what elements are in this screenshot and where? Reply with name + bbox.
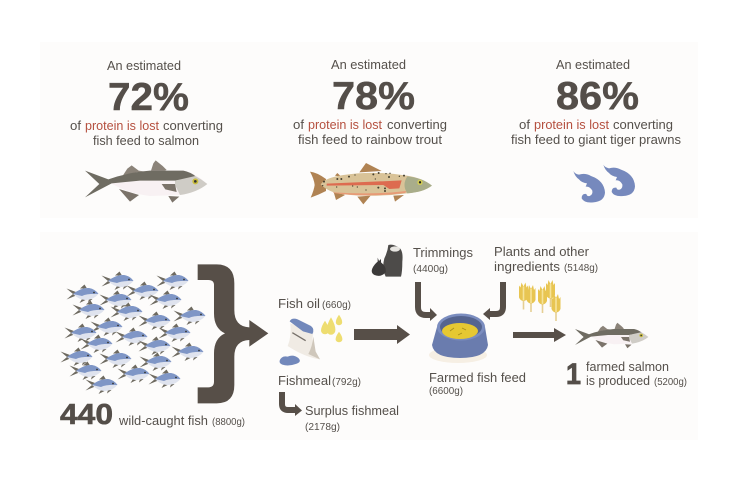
text: 440 wild-caught fish bbox=[60, 399, 245, 431]
stat: rainbow trout: of bbox=[293, 117, 304, 132]
label: farmed fish feed bbox=[429, 370, 526, 397]
stat: giant tiger prawns: An estimated bbox=[556, 57, 630, 72]
icon: feed bowl bbox=[429, 314, 488, 363]
panel: production flow bbox=[40, 232, 698, 440]
stat: giant tiger prawns bbox=[511, 57, 681, 147]
label: fish oil bbox=[278, 296, 351, 311]
stat: salmon: of bbox=[70, 118, 81, 133]
text: 1 farmed salmon: (5200g) bbox=[654, 377, 687, 388]
stat: salmon: An estimated bbox=[107, 58, 181, 73]
stat: rainbow trout: 78% bbox=[332, 75, 415, 118]
stat: giant tiger prawns: fish feed to giant tiger prawns bbox=[511, 132, 681, 147]
label: surplus fishmeal: (2178g) bbox=[305, 422, 340, 433]
label: surplus fishmeal: Surplus fishmeal bbox=[305, 403, 399, 418]
arrow: brace bbox=[198, 264, 268, 403]
icon: fishmeal sack bbox=[280, 319, 320, 366]
label: fishmeal: Fishmeal bbox=[278, 373, 331, 388]
icon: wheat bbox=[519, 280, 560, 321]
stat: rainbow trout: protein is lost bbox=[308, 117, 382, 132]
text: 440 wild-caught fish: wild-caught fish bbox=[118, 413, 208, 428]
label: plants and other ingredients: Plants and other bbox=[494, 244, 590, 259]
label: surplus fishmeal bbox=[305, 403, 399, 433]
wild fish school bbox=[60, 272, 206, 394]
icon: salmon bbox=[85, 160, 207, 203]
label: plants and other ingredients: ingredients bbox=[494, 259, 561, 274]
arrow: to surplus bbox=[282, 392, 302, 416]
stat: giant tiger prawns: 86% bbox=[556, 75, 639, 118]
text: 1 farmed salmon: farmed salmon bbox=[586, 359, 669, 374]
label: plants and other ingredients: (5148g) bbox=[564, 263, 598, 274]
label: trimmings bbox=[413, 245, 473, 275]
label: fish oil: (660g) bbox=[322, 300, 351, 311]
text: 440 wild-caught fish: (8800g) bbox=[212, 417, 245, 428]
stat: salmon: converting bbox=[163, 118, 223, 133]
label: plants and other ingredients bbox=[494, 244, 598, 274]
text: 1 farmed salmon: is produced bbox=[586, 373, 650, 388]
arrow: plants to feed bbox=[483, 282, 503, 320]
stat: salmon: fish feed to salmon bbox=[93, 133, 199, 148]
label: fish oil: Fish oil bbox=[278, 296, 320, 311]
icon: farmed salmon bbox=[575, 323, 648, 348]
stat: salmon: 72% bbox=[108, 76, 189, 119]
panel: protein loss bbox=[40, 42, 698, 218]
stat: salmon bbox=[70, 58, 223, 148]
stat: rainbow trout: An estimated bbox=[331, 57, 406, 72]
stat: giant tiger prawns: protein is lost bbox=[534, 117, 609, 132]
arrow: feed to salmon bbox=[513, 328, 566, 342]
text: 1 farmed salmon: 1 bbox=[566, 358, 581, 391]
label: trimmings: Trimmings bbox=[413, 245, 473, 260]
stat: rainbow trout: converting bbox=[387, 117, 447, 132]
label: farmed fish feed: (6600g) bbox=[429, 386, 463, 397]
arrow: trimmings to feed bbox=[418, 282, 437, 321]
text: 1 farmed salmon bbox=[566, 358, 687, 391]
label: farmed fish feed: Farmed fish feed bbox=[429, 370, 526, 385]
icon: trimming bags bbox=[372, 245, 403, 277]
stat: salmon: protein is lost bbox=[85, 118, 159, 133]
stat: giant tiger prawns: of bbox=[519, 117, 530, 132]
label: fishmeal bbox=[278, 373, 361, 388]
stat: giant tiger prawns: converting bbox=[613, 117, 673, 132]
label: fishmeal: (792g) bbox=[332, 377, 361, 388]
arrow: oil and meal to feed bbox=[354, 325, 410, 344]
icon: oil drops bbox=[321, 315, 342, 342]
icon: prawns bbox=[573, 165, 635, 202]
icon: rainbow trout bbox=[310, 163, 432, 204]
stat: rainbow trout: fish feed to rainbow trout bbox=[298, 132, 442, 147]
text: 440 wild-caught fish: 440 bbox=[60, 399, 113, 431]
stat: rainbow trout bbox=[293, 57, 447, 147]
label: trimmings: (4400g) bbox=[413, 264, 448, 275]
